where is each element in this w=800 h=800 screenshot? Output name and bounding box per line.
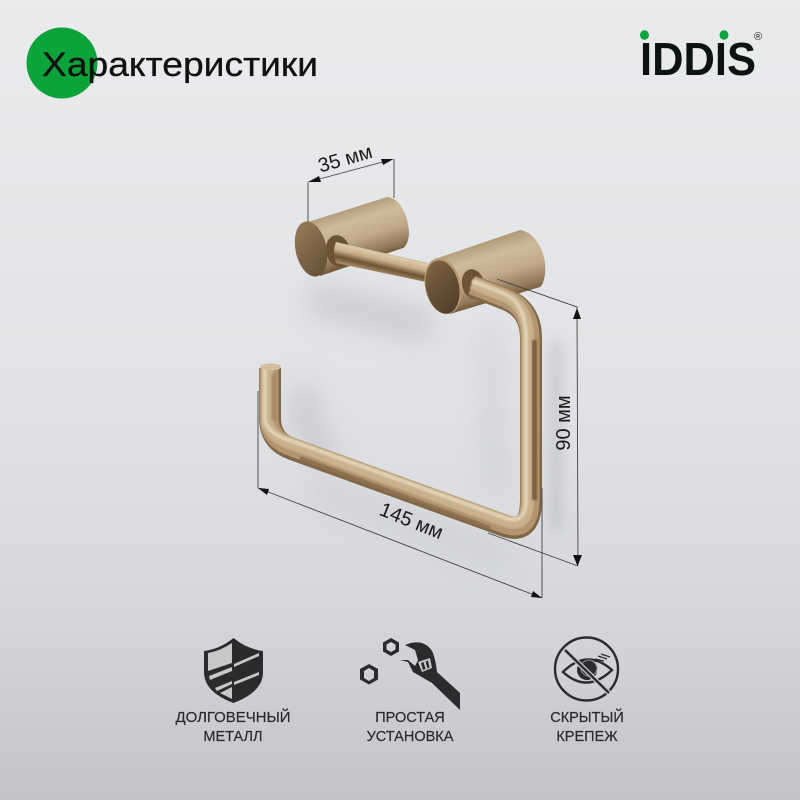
label: simple installation xyxy=(367,710,454,745)
label: simple installation: ПРОСТАЯ xyxy=(375,710,445,726)
right mounting cylinder face xyxy=(419,254,467,318)
dimension: 90 mm xyxy=(488,279,582,566)
label: hidden mount xyxy=(550,708,624,745)
product shadow xyxy=(304,300,556,555)
icon: shield xyxy=(204,638,263,703)
label: durable metal: МЕТАЛЛ xyxy=(203,729,263,745)
icon: wrench and nuts xyxy=(360,638,460,710)
main bent rod xyxy=(260,281,534,528)
label: durable metal: ДОЛГОВЕЧНЫЙ xyxy=(176,708,290,726)
icon: hidden fastener xyxy=(555,638,618,700)
label: simple installation: УСТАНОВКА xyxy=(367,729,454,745)
dimension: 145 mm xyxy=(258,391,542,598)
dimension: 35 mm: 35 мм xyxy=(316,141,375,177)
back tube segment xyxy=(334,242,428,282)
dimension: 35 mm xyxy=(308,141,394,222)
green title circle xyxy=(26,28,98,98)
label: durable metal xyxy=(176,708,290,745)
towel holder product xyxy=(260,197,545,528)
dimension: 90 mm: 90 мм xyxy=(553,395,575,451)
label: hidden mount: КРЕПЕЖ xyxy=(556,729,618,745)
logo: IDDIS: IDDIS xyxy=(640,33,756,85)
logo: IDDIS: ® xyxy=(754,31,762,43)
right mounting cylinder body xyxy=(438,230,545,314)
left mounting cylinder xyxy=(290,197,409,280)
dimension: 145 mm: 145 мм xyxy=(376,499,446,544)
label: hidden mount: СКРЫТЫЙ xyxy=(550,708,624,726)
title: Характеристики xyxy=(42,46,318,84)
